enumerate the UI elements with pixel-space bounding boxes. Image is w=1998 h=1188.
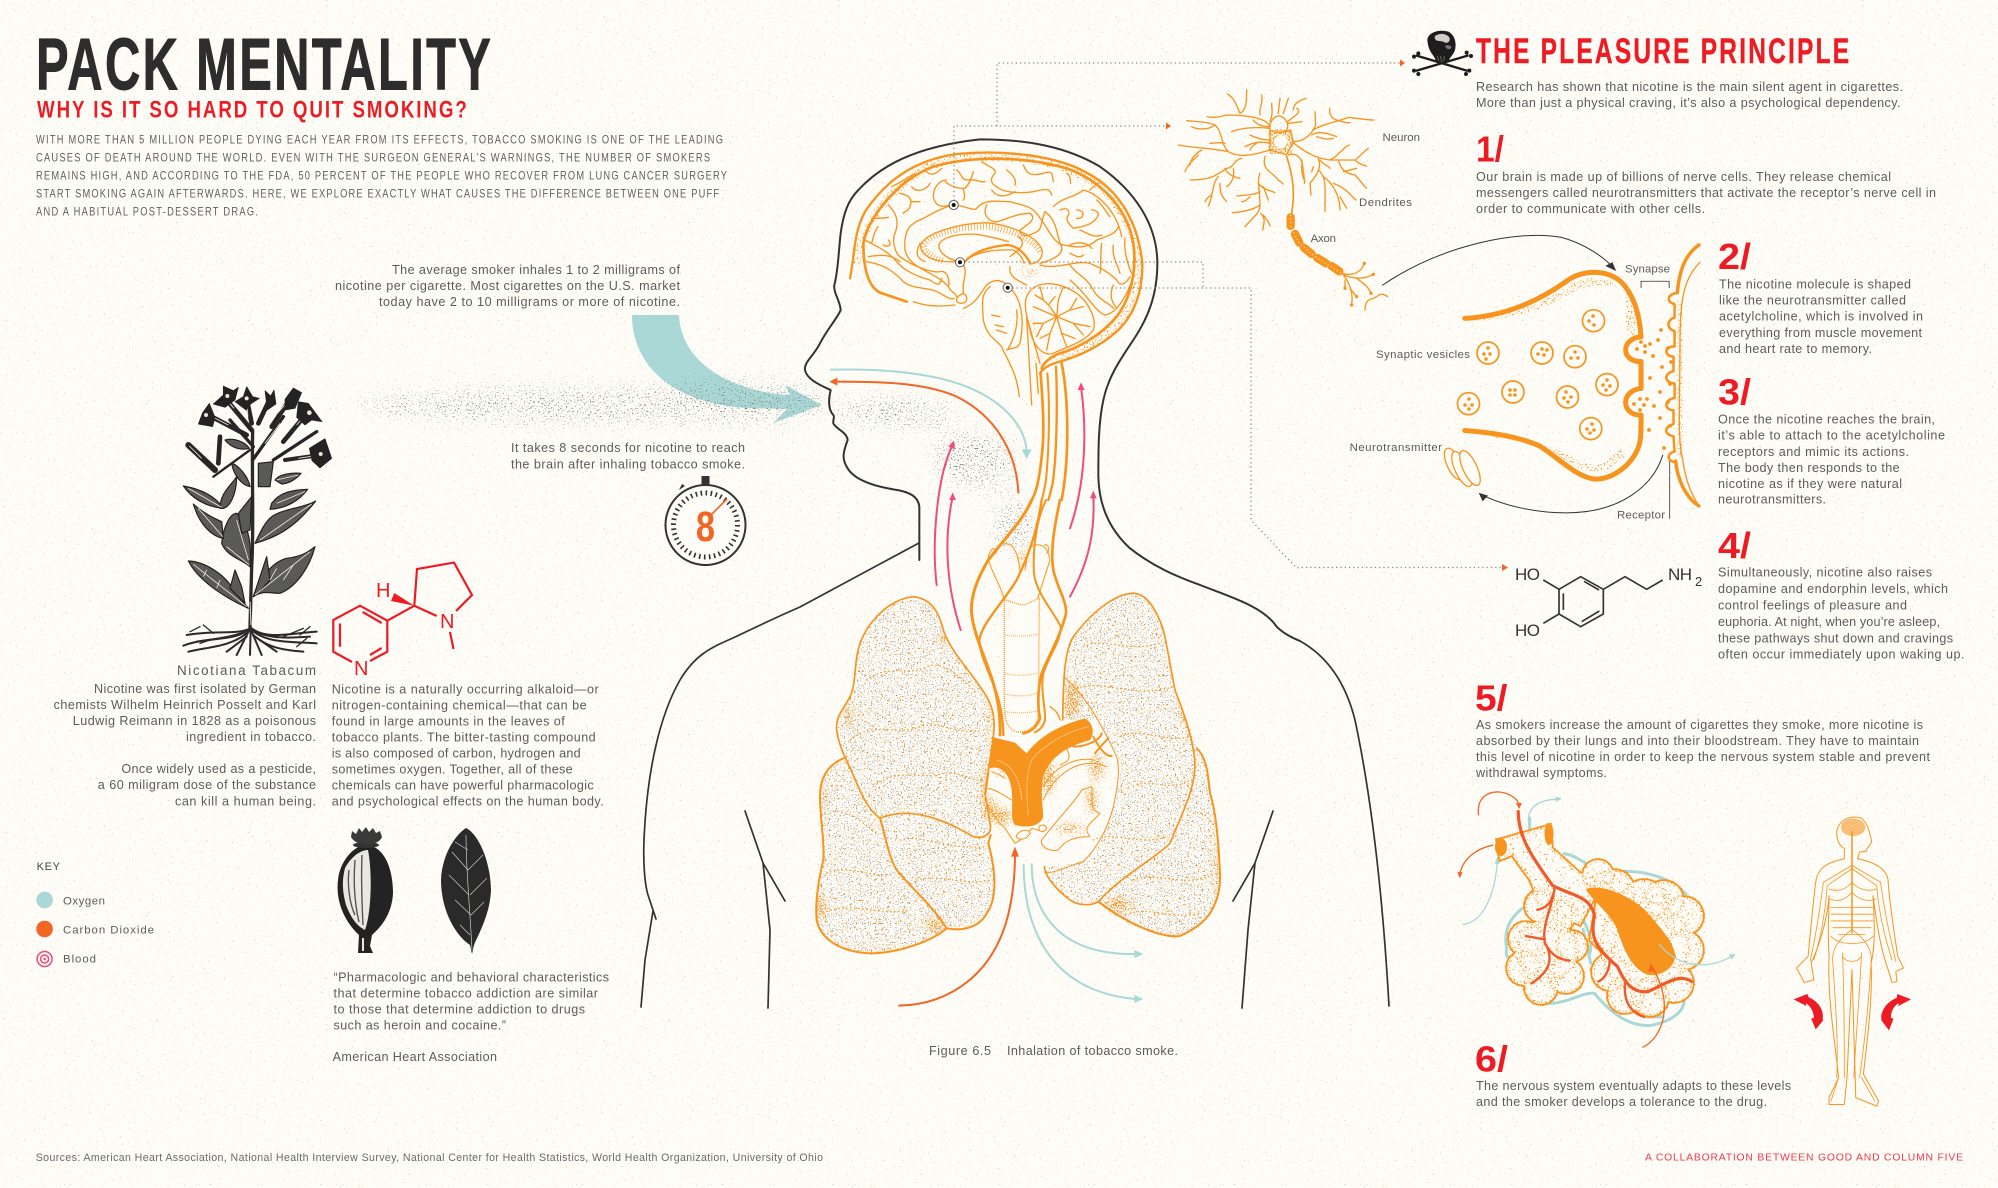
title: PACK MENTALITY [36,25,491,106]
sac outline [1497,825,1703,1016]
chemical diagram: nicotine: H [376,580,390,602]
key / legend: KEY [37,861,61,873]
lung outlines [816,593,1220,953]
callout: eight seconds [511,441,745,472]
credit: A COLLABORATION BETWEEN GOOD AND COLUMN FIVE [1645,1153,1963,1164]
dotted leader lines [949,60,1508,571]
illustration: nervous system figure [1797,817,1903,1106]
step 5: 5/ [1475,678,1508,718]
synapse labels: Synapse [1625,264,1670,276]
synapse labels: Synaptic vesicles [1376,349,1470,361]
step 1 [1476,128,1936,216]
step 6: and the smoker develops a tolerance to the drug. [1476,1095,1767,1109]
filled air sac [1586,888,1675,975]
text: nicotine description: and psychological effects on the human body. [332,794,604,808]
intro paragraph: AND A HABITUAL POST-DESSERT DRAG. [36,205,258,219]
intro paragraph [36,133,728,219]
brain stipple clusters [861,255,1114,363]
lung lobules [823,643,1217,915]
step 3: The body then responds to the [1718,461,1900,475]
trachea [1004,598,1039,732]
meninges stipple [857,157,1138,360]
chemical diagram: dopamine [1515,565,1702,640]
synapse labels [1350,264,1670,522]
callout: milligrams per cigarette: today have 2 to 10 milligrams or more of nicotine. [379,295,680,309]
icon: stopwatch [666,476,746,565]
text: nicotine history: Ludwig Reimann in 1828 as a poisonous [73,714,316,728]
heart stipple [980,545,1107,836]
sources: Sources: American Heart Association, National Health Interview Survey, National Center for Health Statistics, World Health Organization, University of Ohio [36,1152,823,1164]
right lung stipple [1046,594,1220,936]
text: nicotine description: is also composed of carbon, hydrogen and [332,746,581,760]
body outline [1797,817,1903,1106]
neuron labels [1311,132,1420,245]
gyri [865,162,1132,308]
left lung stipple [817,598,994,952]
step 5: As smokers increase the amount of cigarettes they smoke, more nicotine is [1476,718,1923,732]
intro paragraph: START SMOKING AGAIN AFTERWARDS. HERE, WE EXPLORE EXACTLY WHAT CAUSES THE DIFFERENCE BETWEEN ONE PUFF [36,187,719,201]
callout: eight seconds: the brain after inhaling tobacco smoke. [511,458,745,472]
key item: oxygen: Oxygen [63,896,105,908]
heart chambers [985,748,1107,850]
icon: stopwatch: 8 [696,503,715,551]
step 3: nicotine as if they were natural [1718,477,1902,491]
step 2 [1718,236,1923,356]
cerebellum [1010,267,1133,354]
step 2: like the neurotransmitter called [1719,294,1906,308]
text: nicotine history [54,682,316,808]
chemical diagram: dopamine: HO [1515,621,1540,640]
plant name: Nicotiana Tabacum [177,663,316,678]
blood arrows [935,382,1097,630]
step 1: 1/ [1476,128,1504,170]
trachea and heart [1004,598,1039,732]
step 2: acetylcholine, which is involved in [1719,310,1923,324]
quote: to those that determine addiction to drugs [334,1003,585,1017]
stem [250,430,253,628]
illustration: alveoli [1457,792,1736,1047]
text: nicotine description: found in large amounts in the leaves of [332,714,565,728]
text: nicotine description: nitrogen-containing chemical—that can be [332,698,587,712]
step 6 [1475,1038,1791,1109]
carbon dioxide arrow [829,378,1018,493]
text: nicotine history: Once widely used as a pesticide, [121,762,316,776]
illustration: tobacco plant [183,386,332,655]
step 1: Our brain is made up of billions of nerve cells. They release chemical [1476,170,1891,184]
text: nicotine description: Nicotine is a naturally occurring alkaloid—or [332,682,599,696]
step 3: it’s able to attach to the acetylcholine [1718,429,1945,443]
step 2: everything from muscle movement [1719,326,1922,340]
step 1: order to communicate with other cells. [1476,202,1705,216]
key item: blood: Blood [63,954,96,966]
synaptic vesicles [1458,310,1618,440]
blood vessels [1518,812,1692,1017]
airflow arrows in head [829,369,1097,630]
heading: the pleasure principle: THE PLEASURE PRINCIPLE [1476,33,1849,71]
text: nicotine description: tobacco plants. The bitter-tasting compound [332,730,596,744]
axon [1287,157,1293,213]
step 4: often occur immediately upon waking up. [1718,648,1964,662]
step 4: dopamine and endorphin levels, which [1718,582,1948,596]
synapse stipple [1474,278,1683,471]
inner membrane [863,159,1134,368]
tolerance arrow left [1794,994,1823,1029]
illustration: tobacco leaf [441,828,491,954]
brain [1841,819,1865,836]
smoke stipple [350,378,1036,555]
text: nicotine history: Nicotine was first isolated by German [94,682,316,696]
neuron labels: Dendrites [1359,197,1412,209]
callout: milligrams per cigarette: nicotine per cigarette. Most cigarettes on the U.S. market [335,279,680,293]
chemical diagram: dopamine: NH [1668,565,1692,584]
roots [183,625,317,655]
chemical diagram: dopamine: HO [1515,565,1540,584]
airflow arrows at lungs [898,847,1143,1006]
tube openings [1495,823,1554,856]
gas exchange arrows [1457,792,1736,1047]
spine and nerves [1851,832,1853,933]
intro: research [1476,80,1903,110]
synapse diagram [1350,235,1700,522]
pointer arrows [1383,235,1670,519]
chemical diagram: nicotine: N [354,658,368,680]
figure caption [929,1044,1178,1058]
key item: carbon dioxide: Carbon Dioxide [63,925,154,937]
illustration: neuron [1178,90,1388,310]
illustration: poppy pod [338,827,393,953]
text: nicotine description [332,682,604,808]
step 5: this level of nicotine in order to keep the nervous system stable and prevent [1476,750,1930,764]
lungs [810,590,1230,960]
intro paragraph: CAUSES OF DEATH AROUND THE WORLD. EVEN WITH THE SURGEON GENERAL’S WARNINGS, THE NUMBER OF SMOKERS [36,151,710,165]
step 3: neurotransmitters. [1718,493,1826,507]
chemical diagram: nicotine [333,563,472,680]
larynx [988,544,1050,600]
quote: “Pharmacologic and behavioral characteristics [334,970,609,984]
leaves [183,439,316,608]
receptor protein [1440,446,1484,489]
step 3 [1718,372,1945,507]
step 3: Once the nicotine reaches the brain, [1718,413,1935,427]
intro: research: Research has shown that nicotine is the main silent agent in cigarettes. [1476,80,1903,94]
step 3: 3/ [1718,372,1751,412]
synapse labels: Neurotransmitter [1350,442,1442,454]
presynaptic membrane [1465,272,1641,479]
step 3: receptors and mimic its actions. [1718,445,1909,459]
neuron cell body stipple [1270,131,1292,153]
intro: research: More than just a physical craving, it’s also a psychological dependency. [1476,96,1900,110]
subtitle: WHY IS IT SO HARD TO QUIT SMOKING? [37,96,467,123]
step 2: The nicotine molecule is shaped [1719,278,1911,292]
chemical diagram: nicotine: N [440,611,454,633]
heart vessels [989,718,1093,827]
neuron labels: Neuron [1382,132,1420,144]
step 1: messengers called neurotransmitters that activate the receptor’s nerve cell in [1476,186,1936,200]
text: nicotine history: can kill a human being. [175,794,316,808]
capillaries [1506,818,1686,1025]
dendrites [1178,90,1374,230]
leaf veins [188,475,312,607]
quote: that determine tobacco addiction are similar [334,986,598,1000]
synapse labels: Receptor [1617,510,1665,522]
icon: skull and crossbones [1412,31,1473,76]
step 4: 4/ [1718,525,1751,566]
outer membrane [850,153,1142,373]
step 4: Simultaneously, nicotine also raises [1718,566,1932,580]
step 4 [1718,525,1964,662]
text: nicotine description: chemicals can have powerful pharmacologic [332,778,594,792]
step 4: control feelings of pleasure and [1718,598,1907,612]
step 6: 6/ [1475,1038,1508,1080]
flower heads [198,386,332,468]
quote: such as heroin and cocaine.” [334,1018,506,1032]
text: nicotine description: sometimes oxygen. Together, all of these [332,763,573,777]
step 2: 2/ [1718,236,1751,277]
figure caption: Inhalation of tobacco smoke. [1007,1044,1178,1058]
brain [850,153,1142,405]
neurotransmitter dots in cleft [1647,328,1673,450]
text: nicotine history: ingredient in tobacco. [186,730,316,744]
step 5 [1475,678,1930,780]
arrow: inhaled smoke [632,315,822,423]
cell body ring [1269,130,1294,155]
quote [333,970,609,1064]
callout: eight seconds: It takes 8 seconds for nicotine to reach [511,441,745,455]
callout: milligrams per cigarette [335,263,680,309]
axon terminal [1342,263,1388,310]
intro paragraph: WITH MORE THAN 5 MILLION PEOPLE DYING EACH YEAR FROM ITS EFFECTS, TOBACCO SMOKING IS ONE OF THE LEADING [36,133,723,147]
sac stipple [1497,825,1703,1016]
step 5: absorbed by their lungs and into their bloodstream. They have to maintain [1476,734,1919,748]
step 5: withdrawal symptoms. [1475,766,1607,780]
neuron labels: Axon [1311,233,1336,245]
key / legend [36,861,154,966]
nerves from brain [1032,363,1067,500]
nerve strands lower [971,500,1066,735]
figure caption: Figure 6.5 [929,1044,991,1058]
intro paragraph: REMAINS HIGH, AND ACCORDING TO THE FDA, 50 PERCENT OF THE PEOPLE WHO RECOVER FROM LUNG CANCER SURGERY [36,169,728,183]
postsynaptic membrane [1666,245,1700,506]
text: nicotine history: chemists Wilhelm Heinrich Posselt and Karl [54,698,316,712]
tolerance arrow right [1881,994,1911,1030]
callout: milligrams per cigarette: The average smoker inhales 1 to 2 milligrams of [392,263,680,277]
oxygen arrow [831,369,1032,459]
step 4: euphoria. At night, when you’re asleep, [1718,615,1940,629]
body outline [641,139,1389,1008]
chemical diagram: dopamine: 2 [1695,574,1702,589]
text: nicotine history: a 60 miligram dose of the substance [98,778,316,792]
step 2: and heart rate to memory. [1719,342,1872,356]
docked vesicle dots [1632,340,1652,412]
step 4: these pathways shut down and cravings [1718,631,1953,645]
brain markers [949,200,1012,292]
flower tubes [188,397,320,477]
corpus callosum [921,223,1042,405]
step 6: The nervous system eventually adapts to these levels [1476,1079,1791,1093]
quote: American Heart Association [333,1050,497,1064]
